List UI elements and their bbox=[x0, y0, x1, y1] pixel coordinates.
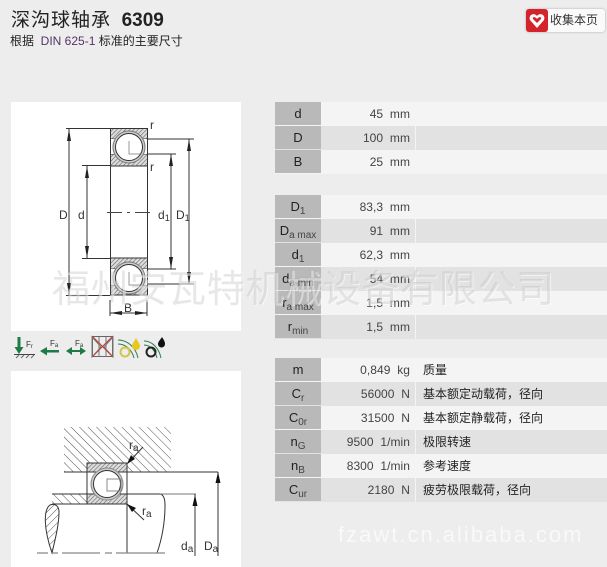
icon: grease lubrication bbox=[118, 338, 140, 358]
table: main dimensions: 25 mm bbox=[370, 155, 410, 169]
mounting labels: r bbox=[142, 504, 146, 518]
icon: axial load one way: a bbox=[55, 343, 59, 349]
mounting labels bbox=[129, 438, 219, 555]
dimension arrows bbox=[67, 129, 191, 315]
table: mass and load ratings bbox=[275, 358, 607, 502]
icon: axial load one way bbox=[40, 339, 59, 356]
icon: radial load: F bbox=[26, 340, 31, 349]
mounting labels: a bbox=[188, 544, 194, 555]
panel: mounting drawing bbox=[11, 371, 241, 567]
panel: bearing drawing bbox=[11, 102, 241, 331]
title: 深沟球轴承 6309 bbox=[11, 10, 164, 31]
watermark: website: fzawt.cn.alibaba.com bbox=[338, 522, 583, 547]
table: further dimensions: 62,3 mm bbox=[360, 248, 410, 262]
table: main dimensions: 45 mm bbox=[370, 107, 410, 121]
mounting labels: a bbox=[133, 443, 139, 454]
table: mass and load ratings: 极限转速 bbox=[423, 435, 471, 449]
table: further dimensions: 1,5 mm bbox=[366, 320, 410, 334]
table: mass and load ratings: nB bbox=[291, 458, 305, 476]
table: further dimensions bbox=[275, 195, 607, 339]
table: main dimensions: D bbox=[293, 130, 303, 145]
dimension labels: 1 bbox=[165, 213, 170, 223]
mounting labels: d bbox=[181, 539, 188, 553]
table: main dimensions bbox=[275, 102, 607, 173]
subtitle: 根据 DIN 625-1 标准的主要尺寸 bbox=[10, 34, 183, 48]
mounting labels: a bbox=[213, 544, 219, 555]
table: further dimensions: 1,5 mm bbox=[366, 296, 410, 310]
table: further dimensions: ra max bbox=[282, 295, 314, 313]
icon: radial load bbox=[14, 337, 35, 358]
table: further dimensions: D1 bbox=[291, 199, 305, 217]
dimension labels: 1 bbox=[185, 213, 190, 223]
dimension labels: d bbox=[158, 208, 165, 222]
icon: axial load two way: a bbox=[80, 343, 84, 349]
dimension labels: D bbox=[176, 208, 185, 222]
table: mass and load ratings: 0,849 kg bbox=[360, 363, 410, 377]
table: mass and load ratings: 8300 1/min bbox=[347, 459, 410, 473]
dimension labels bbox=[59, 118, 190, 315]
table: mass and load ratings: 基本额定动载荷，径向 bbox=[423, 387, 543, 401]
icon: axial load two way bbox=[66, 339, 86, 355]
icon: axial load two way: F bbox=[75, 339, 80, 348]
table: mass and load ratings: 2180 N bbox=[368, 483, 410, 497]
table: further dimensions: d1 bbox=[292, 247, 304, 265]
shaft outline and section bbox=[37, 447, 218, 556]
dimension labels: d bbox=[78, 208, 85, 222]
shaft shoulder hatching bbox=[52, 494, 87, 504]
table: mass and load ratings: 56000 N bbox=[361, 387, 410, 401]
favourite button bbox=[526, 9, 605, 32]
dimension labels: r bbox=[150, 160, 154, 174]
icon: axial load one way: F bbox=[50, 339, 55, 348]
table: mass and load ratings: Cur bbox=[289, 482, 307, 500]
icon: crossed-out bearing bbox=[92, 336, 113, 357]
button label: 收集本页 bbox=[550, 13, 598, 27]
watermark: company name: 福州安瓦特机械设备有限公司 bbox=[52, 269, 555, 311]
arrows bbox=[127, 455, 220, 512]
table: further dimensions: da min bbox=[282, 271, 314, 289]
mounting labels: D bbox=[204, 539, 213, 553]
table: main dimensions: 100 mm bbox=[363, 131, 410, 145]
panel: load and lubrication icons bbox=[14, 336, 165, 358]
table: main dimensions: B bbox=[294, 154, 302, 169]
bearing cross-section bbox=[107, 128, 150, 295]
table: mass and load ratings: 疲劳极限载荷，径向 bbox=[423, 483, 531, 497]
table: further dimensions: rmin bbox=[288, 319, 308, 337]
housing shoulder bbox=[64, 463, 87, 472]
table: mass and load ratings: 9500 1/min bbox=[347, 435, 410, 449]
dimension labels: r bbox=[150, 118, 154, 132]
table: further dimensions: 54 mm bbox=[370, 272, 410, 286]
mounting labels: r bbox=[129, 438, 133, 452]
table: mass and load ratings: Cr bbox=[292, 386, 304, 404]
table: mass and load ratings: 31500 N bbox=[361, 411, 410, 425]
table: mass and load ratings: C0r bbox=[289, 410, 307, 428]
bearing section bbox=[87, 463, 127, 504]
table: further dimensions: 91 mm bbox=[370, 224, 410, 238]
icon: oil lubrication bbox=[144, 337, 165, 358]
dimension lines bbox=[66, 128, 194, 316]
icon: radial load: r bbox=[31, 344, 33, 350]
housing hatching bbox=[64, 427, 171, 472]
table: further dimensions: 83,3 mm bbox=[360, 200, 410, 214]
table: mass and load ratings: 参考速度 bbox=[423, 459, 471, 473]
mounting labels: a bbox=[146, 509, 152, 520]
table: further dimensions: Da max bbox=[280, 223, 316, 241]
table: main dimensions: d bbox=[294, 106, 302, 121]
table: mass and load ratings: 基本额定静载荷，径向 bbox=[423, 411, 543, 425]
dimension labels: D bbox=[59, 208, 68, 222]
table: mass and load ratings: 质量 bbox=[423, 363, 447, 377]
icon: heart bbox=[526, 9, 548, 32]
table: mass and load ratings: nG bbox=[290, 434, 306, 452]
dimension labels: B bbox=[124, 301, 132, 315]
table: mass and load ratings: m bbox=[293, 362, 303, 377]
